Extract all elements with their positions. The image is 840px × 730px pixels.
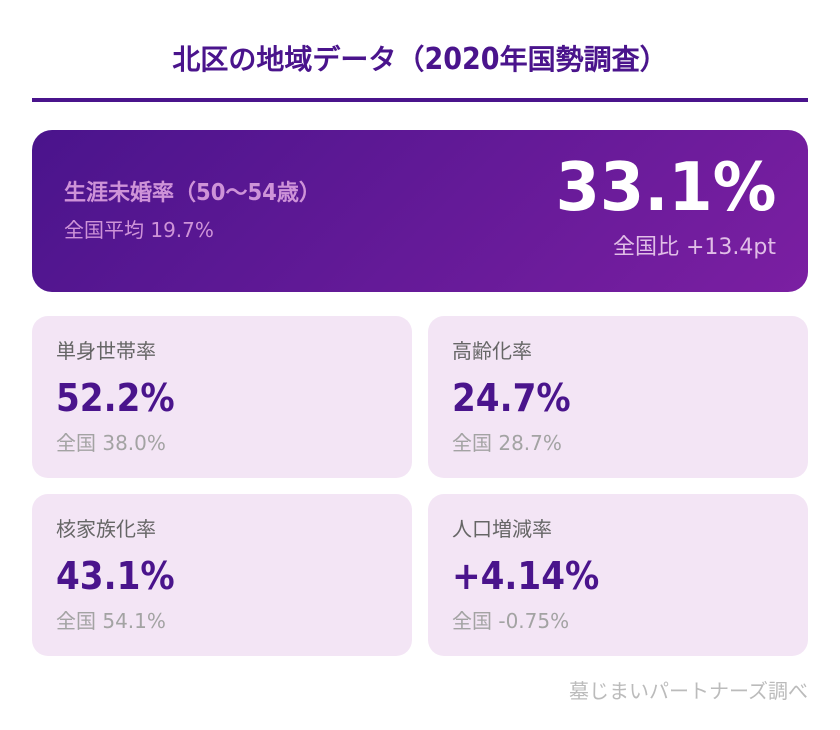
value: 24.7% xyxy=(452,376,571,420)
panel: hero 生涯未婚率 xyxy=(32,130,808,292)
national figure: 全国 28.7% xyxy=(452,431,562,455)
panel: 単身世帯率 xyxy=(32,316,412,478)
title underline xyxy=(32,98,808,102)
label: 高齢化率 xyxy=(452,339,532,363)
value: 52.2% xyxy=(56,376,175,420)
title: 北区の地域データ（2020年国勢調査） xyxy=(172,42,668,77)
label: 核家族化率 xyxy=(56,517,156,541)
panel: 人口増減率 xyxy=(428,494,808,656)
panel: 高齢化率 xyxy=(428,316,808,478)
label: 単身世帯率 xyxy=(56,339,156,363)
source note: 墓じまいパートナーズ調べ xyxy=(569,679,808,703)
panel: 核家族化率 xyxy=(32,494,412,656)
hero comparison: 全国比 +13.4pt xyxy=(613,235,776,260)
value: +4.14% xyxy=(452,554,599,598)
national figure: 全国 38.0% xyxy=(56,431,166,455)
value: 43.1% xyxy=(56,554,175,598)
national figure: 全国 54.1% xyxy=(56,609,166,633)
label: 人口増減率 xyxy=(452,517,552,541)
hero label: 生涯未婚率（50〜54歳） xyxy=(64,178,321,206)
hero value: 33.1% xyxy=(555,148,776,226)
national figure: 全国 -0.75% xyxy=(452,609,569,633)
hero national average: 全国平均 19.7% xyxy=(64,218,214,242)
